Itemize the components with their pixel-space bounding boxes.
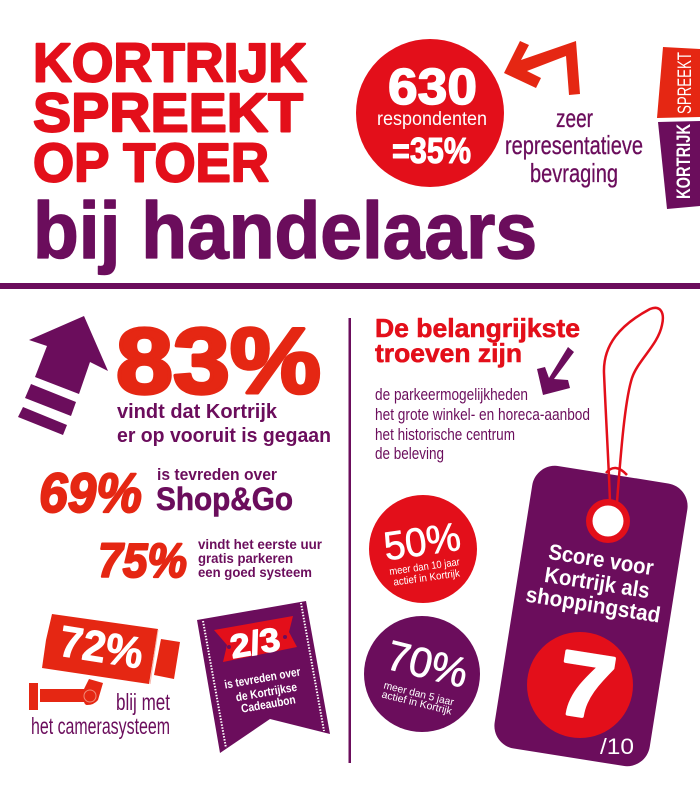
icon: purple up arrow	[18, 316, 108, 435]
stat: 69% Shop&Go: Shop&Go	[156, 481, 293, 517]
title: bij handelaars	[33, 186, 537, 275]
respondents circle: 630	[388, 58, 477, 115]
stat: ribbon 2/3: 2/3	[227, 620, 283, 665]
horizontal rule	[0, 283, 700, 289]
stat: 50% circle	[369, 495, 477, 603]
stat: 70% circle: meer dan 5 jaar	[382, 680, 456, 709]
logo: Kortrijk spreekt	[657, 47, 700, 209]
stat: 50% circle: actief in Kortrijk	[393, 567, 461, 589]
title: OP TOER	[33, 132, 269, 194]
stat: 75% parking: vindt het eerste uur	[198, 536, 323, 552]
representative survey note: zeer	[556, 103, 593, 133]
stat: 70% circle	[364, 616, 480, 732]
respondents circle	[356, 39, 504, 187]
logo: Kortrijk spreekt: KORTRIJK	[674, 124, 695, 199]
tag caption: shoppingstad	[524, 582, 662, 628]
stat: camera 72%: het camerasysteem	[31, 713, 170, 739]
icon: red arrow	[504, 41, 580, 95]
stat: 50% circle: meer dan 10 jaar	[389, 556, 461, 578]
stat: 69% Shop&Go	[39, 461, 293, 524]
icon: purple down arrow	[537, 347, 574, 395]
stat: 50% circle: 50%	[381, 515, 463, 569]
column divider	[348, 318, 351, 763]
title: SPREEKT	[33, 82, 303, 144]
stat: 69% Shop&Go: 69%	[39, 461, 142, 524]
representative survey note	[505, 103, 643, 188]
stat: 75% parking: 75%	[98, 535, 187, 588]
heading: strengths: troeven zijn	[375, 338, 522, 368]
stat: ribbon 2/3: Cadeaubon	[240, 692, 297, 716]
price tag score	[491, 308, 691, 770]
stat: camera 72%: blij met	[116, 689, 170, 715]
tag caption: Score voor	[547, 539, 656, 580]
stat: 83%: 83%	[116, 309, 321, 413]
stat: 75% parking: een goed systeem	[198, 564, 312, 580]
logo: Kortrijk spreekt: SPREEKT	[675, 52, 696, 114]
panel: right column	[364, 308, 691, 770]
respondents circle: =35%	[392, 130, 471, 171]
title	[33, 32, 537, 275]
representative survey note: bevraging	[530, 158, 618, 188]
stat: 69% Shop&Go: is tevreden over	[157, 465, 277, 484]
out of ten: /10	[600, 734, 634, 759]
strengths list: het grote winkel- en horeca-aanbod	[375, 406, 590, 424]
stat: camera 72%	[29, 614, 180, 739]
tag body	[491, 462, 691, 770]
tag eyelet	[586, 499, 630, 543]
score circle	[527, 632, 633, 740]
title: KORTRIJK	[33, 32, 307, 94]
stat: 83%	[116, 309, 331, 447]
strengths list: de parkeermogelijkheden	[375, 386, 528, 404]
stat: 83%: vindt dat Kortrijk	[117, 401, 278, 423]
stat: 75% parking	[98, 535, 323, 588]
score circle: 7	[550, 633, 621, 740]
stat: ribbon 2/3: de Kortrijkse	[235, 680, 298, 704]
panel: left column statistics	[18, 309, 331, 753]
stat: ribbon 2/3	[197, 601, 330, 753]
strengths list: de beleving	[375, 445, 444, 463]
strengths list: het historische centrum	[375, 426, 515, 444]
respondents circle: respondenten	[377, 108, 487, 130]
strengths list	[375, 386, 590, 463]
tag string	[604, 308, 663, 502]
stat: 70% circle: 70%	[382, 631, 473, 697]
heading: strengths	[375, 313, 580, 368]
stat: 83%: er op vooruit is gegaan	[117, 425, 331, 447]
stat: camera 72%: 72%	[56, 617, 147, 678]
tag caption	[524, 539, 662, 628]
stat: 70% circle: actief in Kortrijk	[380, 689, 454, 718]
stat: ribbon 2/3: is tevreden over	[223, 664, 302, 692]
stat: 75% parking: gratis parkeren	[198, 550, 293, 566]
heading: strengths: De belangrijkste	[375, 313, 580, 343]
tag caption: Kortrijk als	[543, 562, 651, 603]
representative survey note: representatieve	[505, 130, 643, 160]
